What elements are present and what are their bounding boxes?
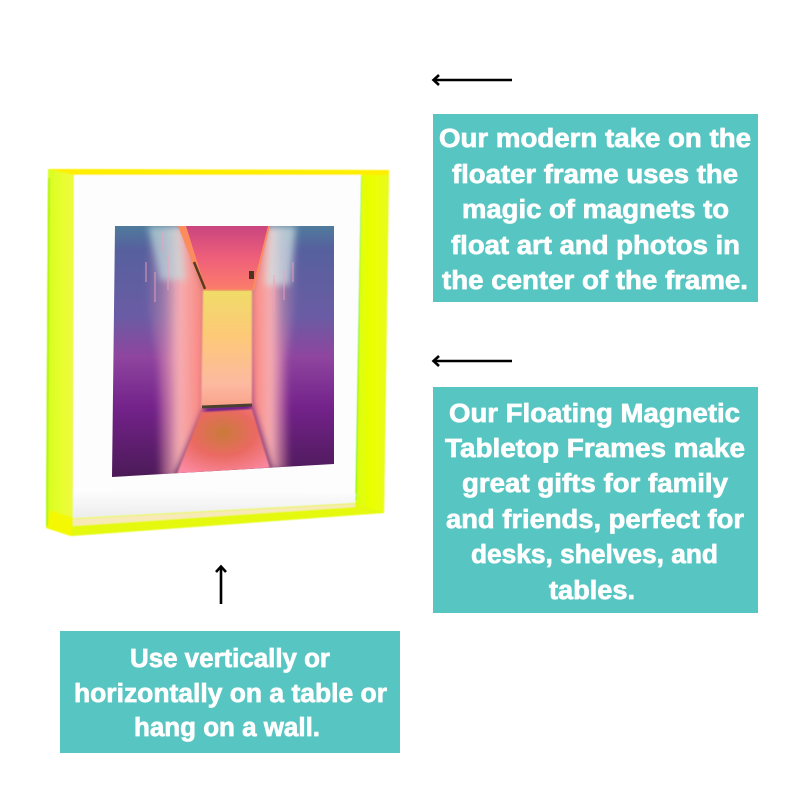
callout: modern take: float art and photos in xyxy=(451,232,740,260)
callout: modern take: magic of magnets to xyxy=(462,196,729,224)
arrow: bottom, pointing up xyxy=(216,566,226,604)
callout: gifts: tables. xyxy=(549,577,635,605)
arrow: top, pointing left xyxy=(434,75,512,85)
callout: modern take: Our modern take on the xyxy=(439,125,751,153)
callout: use vertically or horizontally: Use vertically or xyxy=(130,645,330,673)
callout: gifts: great gifts for family xyxy=(462,470,729,498)
callout: gifts xyxy=(433,387,758,613)
callout: gifts: Tabletop Frames make xyxy=(445,435,745,463)
callout: modern take: the center of the frame. xyxy=(442,267,748,295)
callout: gifts: and friends, perfect for xyxy=(446,506,744,534)
callout: use vertically or horizontally xyxy=(60,631,400,753)
callout: gifts: Our Floating Magnetic xyxy=(449,400,740,428)
acrylic block xyxy=(46,169,389,536)
white mat xyxy=(73,175,361,518)
callout: gifts: desks, shelves, and xyxy=(471,541,718,569)
arrow: middle, pointing left xyxy=(434,356,512,366)
callout: modern take xyxy=(433,114,758,302)
artwork in the frame xyxy=(110,224,336,480)
bottom inner edge xyxy=(71,503,384,536)
callout: use vertically or horizontally: horizontally on a table or xyxy=(74,680,387,708)
callout: use vertically or horizontally: hang on a wall. xyxy=(134,714,320,742)
vertical streaks on the walls xyxy=(146,232,293,315)
callout: modern take: floater frame uses the xyxy=(452,161,738,189)
product photo: neon acrylic frame xyxy=(46,169,389,536)
